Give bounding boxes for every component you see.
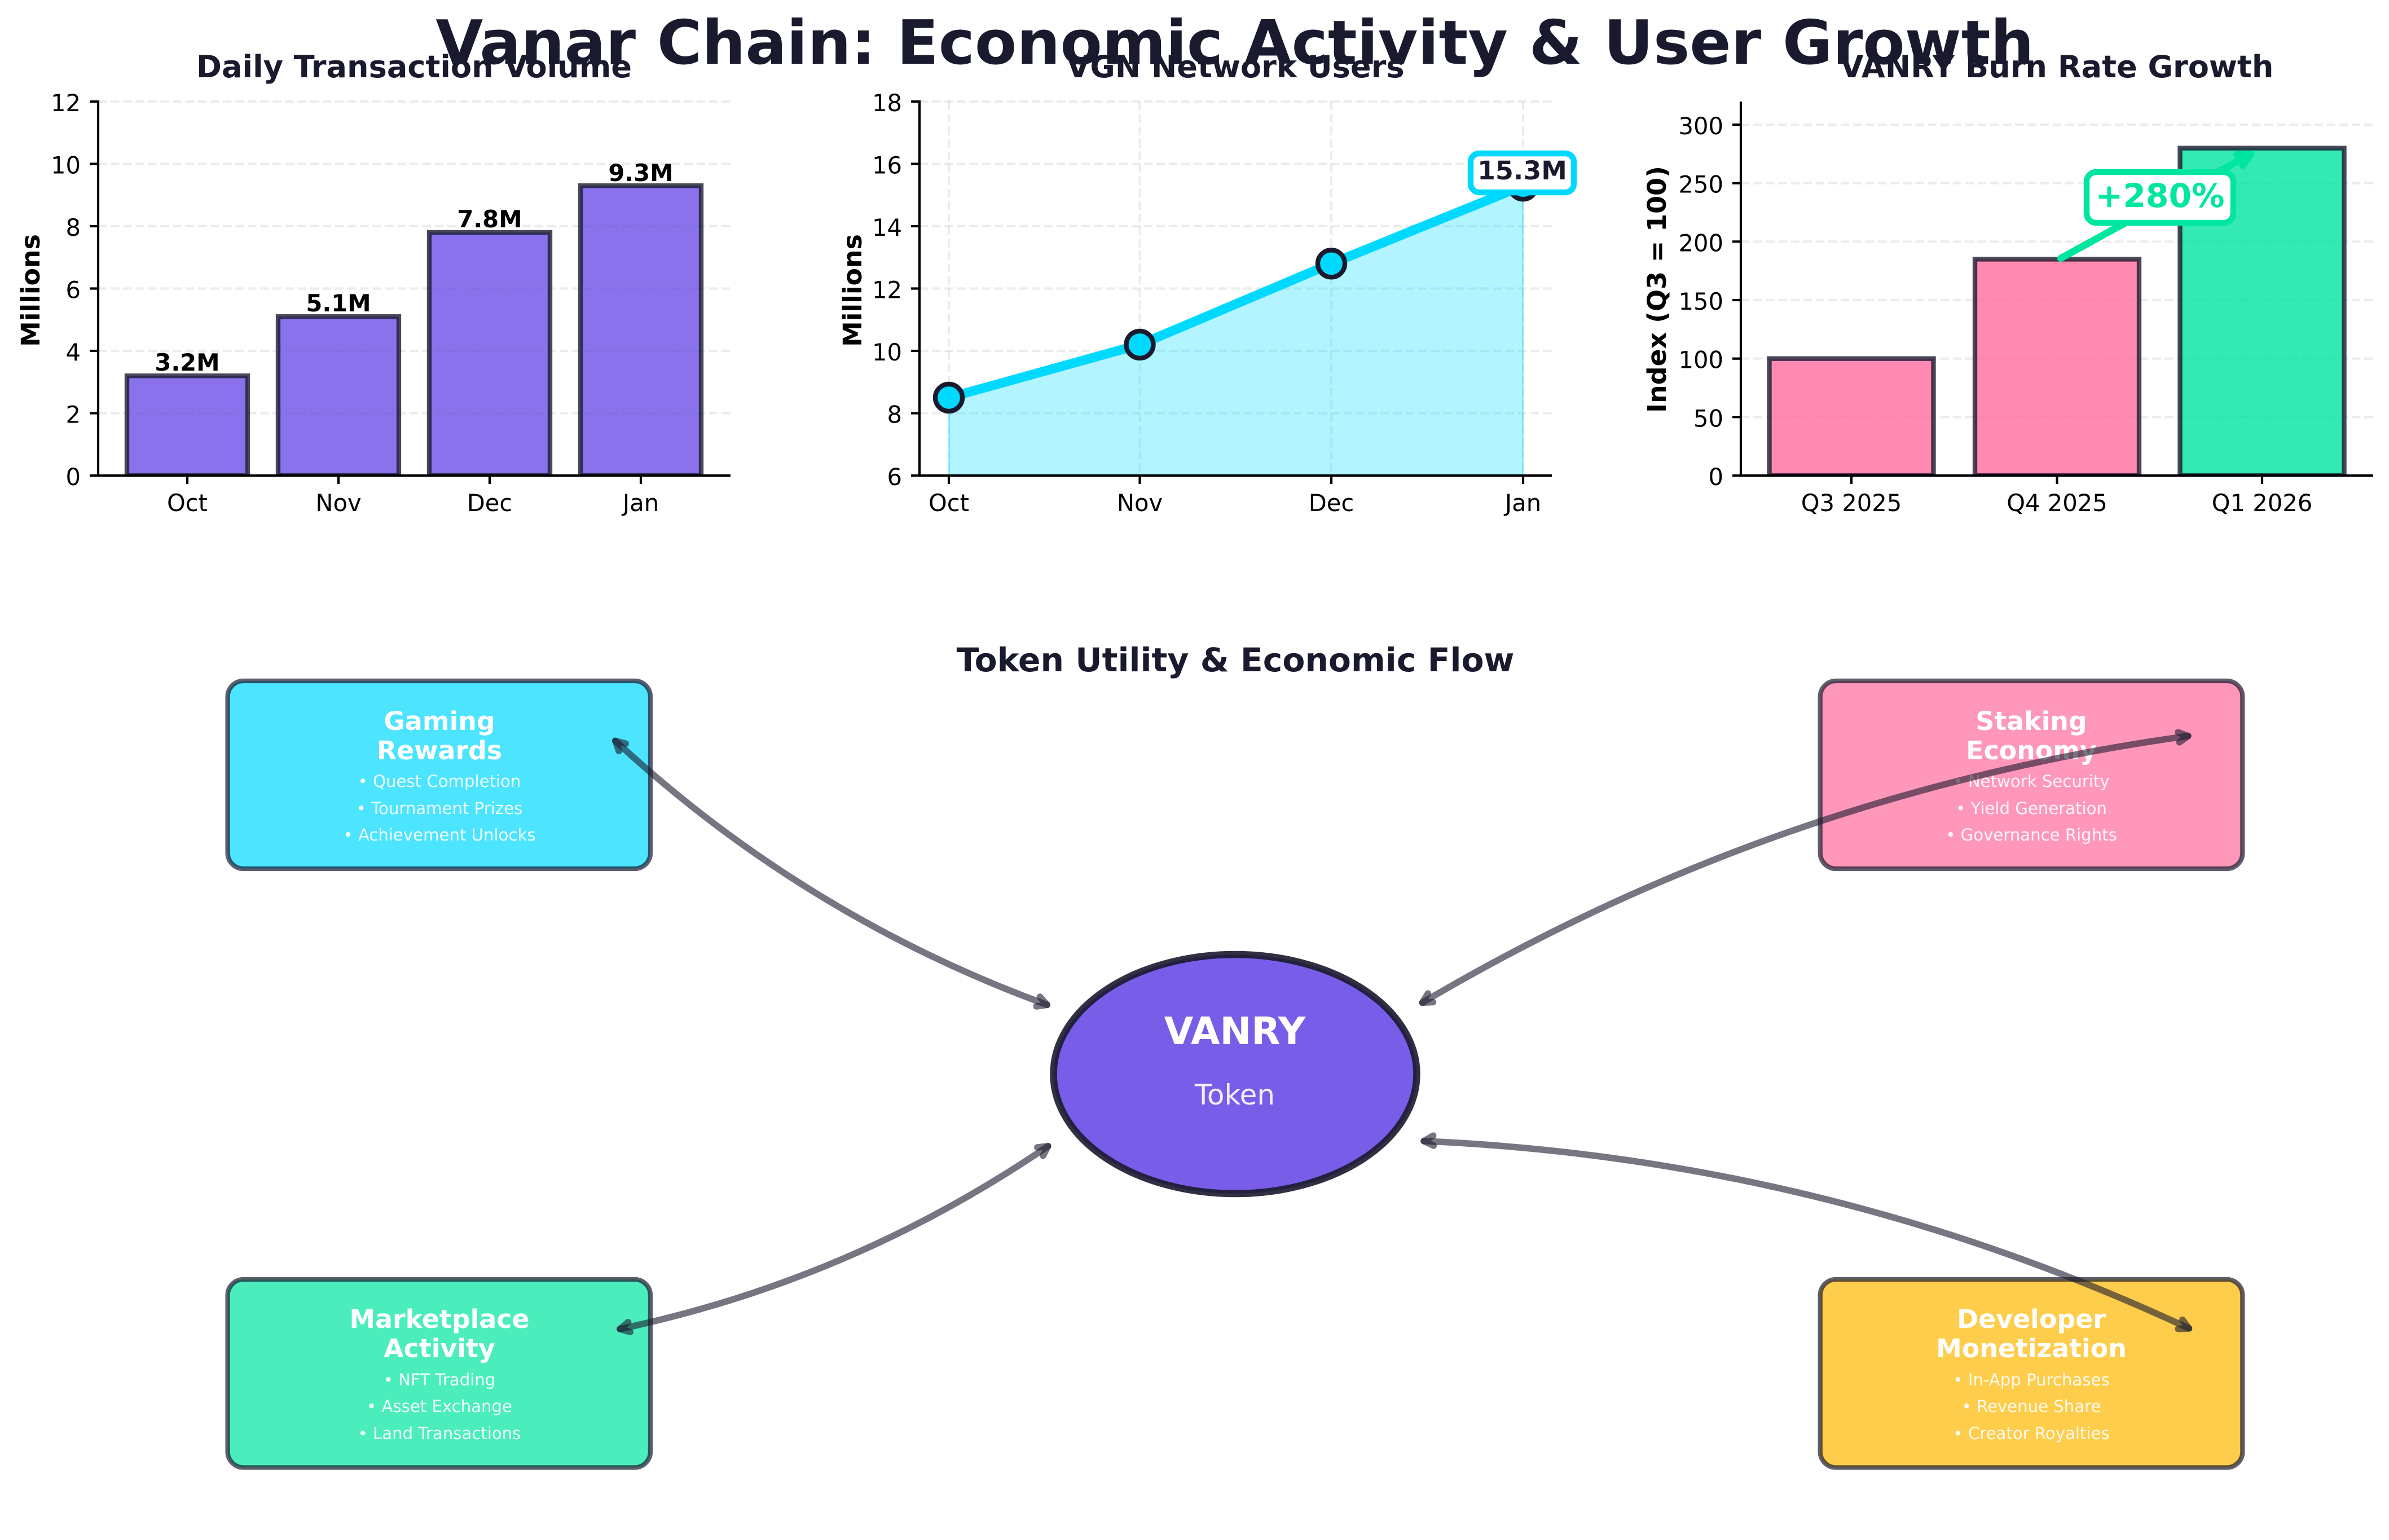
y tick labels <box>1678 112 1723 491</box>
list: developer monetization <box>1953 1370 2110 1443</box>
y axis label: Index (Q3 = 100) <box>1642 166 1672 413</box>
panel: gaming rewards <box>228 681 650 869</box>
callout: 15.3M: 15.3M <box>1477 155 1567 186</box>
arrow: VANRY to developer monetization <box>1424 1136 2189 1329</box>
panel: VANRY burn rate growth chart <box>1642 102 2373 517</box>
value labels: 5.1M <box>306 289 371 317</box>
y tick labels: 6 <box>887 463 902 491</box>
list: staking economy: • Yield Generation <box>1956 799 2107 818</box>
list: staking economy: • Governance Rights <box>1946 825 2117 844</box>
x tick labels: Oct <box>929 489 969 517</box>
x tick labels <box>167 489 659 517</box>
list: marketplace activity: • NFT Trading <box>384 1370 495 1389</box>
list: developer monetization: • Revenue Share <box>1962 1397 2101 1416</box>
x tick labels: Q3 2025 <box>1801 489 1902 517</box>
list: marketplace activity <box>358 1370 521 1443</box>
y tick labels: 14 <box>872 214 902 241</box>
x tick labels: Q4 2025 <box>2007 489 2108 517</box>
y tick labels: 10 <box>872 338 902 366</box>
section heading: token flow: Token Utility & Economic Flow <box>957 641 1514 679</box>
y tick labels: 100 <box>1678 346 1723 374</box>
y tick labels <box>872 89 902 491</box>
value labels <box>155 159 674 376</box>
heading: gaming rewards: Gaming <box>384 706 495 736</box>
user growth line <box>949 186 1523 398</box>
x tick labels <box>929 489 1541 517</box>
y tick labels: 200 <box>1678 229 1723 257</box>
data point markers <box>935 172 1537 411</box>
y tick labels: 300 <box>1678 112 1723 140</box>
y tick labels: 0 <box>1708 463 1723 491</box>
bars: daily transaction volume <box>127 186 701 476</box>
heading: staking economy: Staking <box>1976 706 2087 736</box>
bars: burn rate index <box>1769 148 2344 476</box>
y tick labels: 8 <box>65 214 81 241</box>
axes: daily transaction volume <box>90 100 731 484</box>
heading: developer monetization: Developer <box>1957 1304 2106 1334</box>
list: developer monetization: • Creator Royalties <box>1953 1424 2110 1443</box>
y tick labels: 12 <box>51 89 81 117</box>
area fill under line <box>949 186 1523 476</box>
heading: marketplace activity: Marketplace <box>349 1304 530 1334</box>
chart title: daily transaction volume: Daily Transaction Volume <box>196 49 632 85</box>
arrow: VANRY to marketplace activity <box>620 1146 1048 1332</box>
arrow: burn growth annotation <box>2061 154 2251 258</box>
y tick labels: 18 <box>872 89 902 117</box>
y tick labels: 2 <box>65 401 81 429</box>
x tick labels: Jan <box>1503 489 1541 517</box>
panel: developer monetization <box>1820 1279 2242 1468</box>
list: staking economy <box>1946 772 2117 844</box>
panel: marketplace activity <box>228 1279 650 1468</box>
heading: staking economy: Economy <box>1966 735 2097 765</box>
y axis label: Millions <box>15 234 46 347</box>
x tick labels: Q1 2026 <box>2212 489 2312 517</box>
list: marketplace activity: • Land Transactions <box>358 1424 521 1443</box>
x tick labels: Oct <box>167 489 208 517</box>
heading: staking economy <box>1966 706 2097 765</box>
arrow: VANRY to gaming rewards <box>615 741 1047 1006</box>
list: staking economy: • Network Security <box>1953 772 2110 791</box>
value labels: 7.8M <box>457 205 522 233</box>
axes: burn rate <box>1732 102 2373 484</box>
callout: +280% <box>2087 172 2233 223</box>
panel: staking economy <box>1820 681 2242 869</box>
chart title: VGN network users: VGN Network Users <box>1066 49 1405 85</box>
list: developer monetization: • In-App Purchases <box>1953 1370 2110 1389</box>
heading: developer monetization <box>1936 1304 2127 1363</box>
callout: +280%: +280% <box>2095 177 2225 215</box>
y tick labels: 12 <box>872 276 902 303</box>
value labels: 9.3M <box>608 159 674 187</box>
heading: gaming rewards: Rewards <box>377 735 502 765</box>
list: gaming rewards: • Quest Completion <box>358 772 521 791</box>
central node: VANRY token: VANRY <box>1164 1009 1306 1053</box>
central node: VANRY token <box>1054 954 1417 1194</box>
main title: Vanar Chain: Economic Activity & User Growth <box>435 7 2034 78</box>
y tick labels <box>51 89 81 491</box>
y tick labels: 50 <box>1693 404 1723 432</box>
list: gaming rewards <box>343 772 536 844</box>
arrow: VANRY to staking economy <box>1422 732 2188 1003</box>
central node: VANRY token: Token <box>1194 1079 1275 1111</box>
y tick labels: 250 <box>1678 171 1723 199</box>
value labels: 3.2M <box>155 349 220 376</box>
y tick labels: 10 <box>51 151 81 179</box>
list: gaming rewards: • Tournament Prizes <box>357 799 522 818</box>
y tick labels: 16 <box>872 151 902 179</box>
y tick labels: 150 <box>1678 288 1723 315</box>
axes: VGN users <box>911 100 1552 484</box>
x tick labels <box>1801 489 2312 517</box>
x tick labels: Dec <box>467 489 512 517</box>
panel: daily transaction volume chart <box>15 89 731 517</box>
list: gaming rewards: • Achievement Unlocks <box>343 825 536 844</box>
x tick labels: Jan <box>621 489 659 517</box>
x tick labels: Nov <box>1117 489 1163 517</box>
list: marketplace activity: • Asset Exchange <box>367 1397 512 1416</box>
y axis label: Millions <box>837 234 868 347</box>
y tick labels: 6 <box>65 276 81 303</box>
heading: developer monetization: Monetization <box>1936 1333 2127 1363</box>
heading: marketplace activity <box>349 1304 530 1363</box>
y tick labels: 0 <box>65 463 81 491</box>
chart title: VANRY burn rate growth: VANRY Burn Rate Growth <box>1840 49 2273 85</box>
heading: marketplace activity: Activity <box>384 1333 495 1363</box>
x tick labels: Dec <box>1309 489 1354 517</box>
x tick labels: Nov <box>315 489 362 517</box>
y tick labels: 8 <box>887 401 902 429</box>
y tick labels: 4 <box>65 338 81 366</box>
callout: 15.3M <box>1471 153 1574 192</box>
heading: gaming rewards <box>377 706 502 765</box>
panel: VGN network users chart <box>837 89 1574 517</box>
